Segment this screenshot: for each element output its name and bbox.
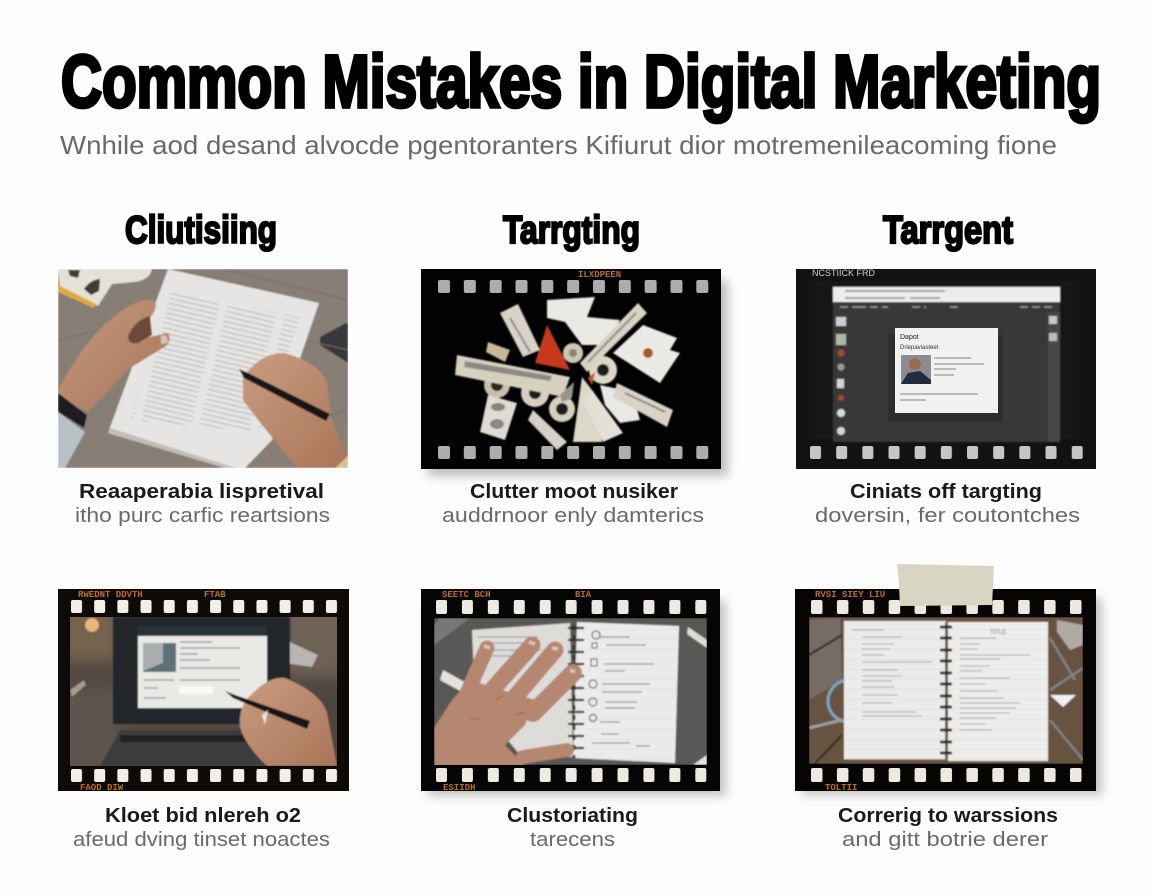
photo: hands marking a document — [58, 269, 348, 468]
caption: notebook with hand — [507, 805, 638, 851]
film shadow — [428, 600, 726, 796]
caption: laptop: Kloet bid nlereh o2 — [105, 805, 301, 827]
panel: clutising — [58, 209, 348, 527]
heading: clutising: Cliutisiing — [125, 209, 277, 252]
film strip with tablet photo: FTAB — [204, 590, 226, 600]
film strip with notebook photo — [795, 589, 1096, 793]
film strip with browser screenshot: NCSTIICK FRD — [812, 268, 876, 278]
film strip with tablet photo: FAOD DIW — [80, 783, 124, 793]
film strip with notebook photo: TITLE — [990, 630, 1006, 636]
heading: tarrgting: Tarrgting — [503, 209, 640, 252]
film strip with tablet photo: RWEDNT DDVTH — [78, 590, 143, 600]
panel: open notebook — [795, 564, 1102, 851]
caption: notebook with hand: Clustoriating — [507, 805, 638, 827]
film shadow — [802, 598, 1102, 795]
caption: clutising — [75, 481, 330, 527]
film strip with clutter photo: ILXDPEEN — [578, 270, 621, 280]
caption: targeting clutter: Clutter moot nusiker — [470, 481, 678, 503]
caption: targent screen: Ciniats off targting — [850, 481, 1042, 503]
film strip with clutter photo — [421, 269, 721, 469]
film strip with notebook photo — [421, 589, 720, 793]
film strip with browser screenshot — [796, 268, 1096, 469]
film strip with notebook photo: TOLTII — [825, 783, 857, 793]
caption: targeting clutter: auddrnoor enly damterics — [442, 505, 704, 527]
caption: open notebook: Correrig to warssions — [838, 805, 1058, 827]
film shadow — [428, 280, 728, 476]
film strip with tablet photo — [58, 589, 349, 793]
panel: targent screen — [796, 209, 1096, 527]
film strip with notebook photo: ESIIDH — [443, 783, 475, 793]
film strip with notebook photo: SEETC BCH — [442, 590, 491, 600]
caption: targeting clutter — [442, 481, 704, 527]
panel: targeting clutter — [421, 209, 728, 527]
caption: clutising: itho purc carfic reartsions — [75, 505, 330, 527]
film strip with browser screenshot: Driepaviasteet — [900, 345, 939, 351]
film strip with notebook photo: RVSI SIEY LIU — [815, 590, 885, 600]
subtitle: Wnhile aod desand alvocde pgentoranters Kifiurut dior motremenileacoming fione — [60, 130, 1057, 160]
tape — [897, 564, 994, 606]
caption: targent screen: doversin, fer coutontches — [815, 505, 1080, 527]
caption: open notebook: and gitt botrie derer — [842, 829, 1048, 851]
caption: laptop — [73, 805, 330, 851]
caption: targent screen — [815, 481, 1080, 527]
caption: open notebook — [838, 805, 1058, 851]
caption: notebook with hand: tarecens — [530, 829, 615, 851]
panel: notebook with hand — [421, 589, 726, 851]
caption: laptop: afeud dving tinset noactes — [73, 829, 330, 851]
heading: tarrgent: Tarrgent — [883, 209, 1013, 252]
film strip with browser screenshot: Dapot — [900, 334, 919, 341]
caption: clutising: Reaaperabia lispretival — [79, 481, 324, 503]
film strip with notebook photo: BIA — [575, 590, 592, 600]
panel: laptop — [58, 589, 349, 851]
